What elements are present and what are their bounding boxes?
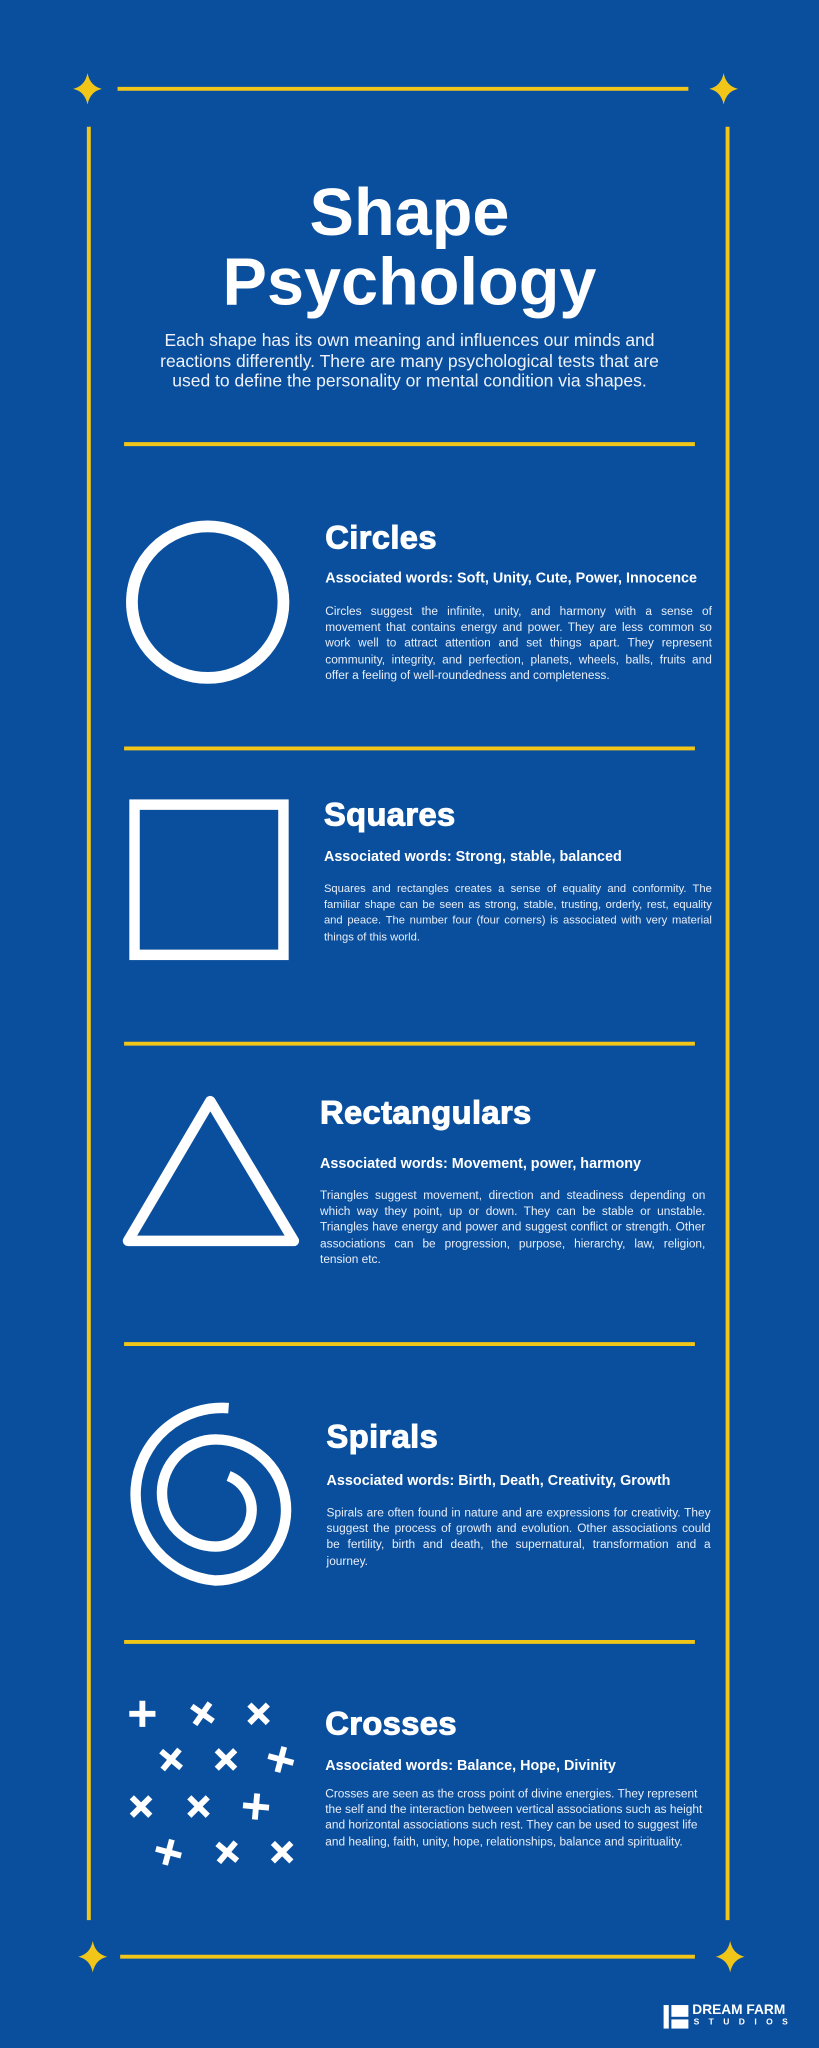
- section: crosses: Crosses: [325, 1706, 457, 1742]
- section: spirals: [326, 1419, 711, 1568]
- section: rectangulars: Associated words: Movement, power, harmony: [320, 1156, 641, 1172]
- section: squares: Associated words: Strong, stable, balanced: [324, 849, 622, 865]
- section: crosses: Crosses are seen as the cross point of divine energies. They represent the self and the interaction between vertical associations such as height and horizontal associations such rest. They can be used to suggest life and healing, faith, unity, hope, relationships, balance and spirituality.: [325, 1787, 702, 1848]
- section: rectangulars: [320, 1095, 706, 1265]
- logo: STUDIOS: [694, 2018, 797, 2027]
- section: rectangulars: Rectangulars: [320, 1095, 532, 1131]
- section: crosses: [325, 1706, 702, 1848]
- section: spirals: Spirals are often found in nature and are expressions for creativity. They suggest the process of growth and evolution. Other associations could be fertility, birth and death, the supernatural, transformation and a journey.: [327, 1506, 711, 1567]
- logo: [664, 2002, 797, 2029]
- logo: DREAM FARM: [692, 2002, 785, 2018]
- title: Psychology: [223, 244, 596, 319]
- icon: spiral: [130, 1402, 292, 1586]
- title: Shape: [310, 175, 509, 249]
- section: circles: [325, 520, 712, 682]
- title: [223, 175, 596, 319]
- icon: crosses: [129, 1700, 294, 1866]
- section: spirals: Associated words: Birth, Death, Creativity, Growth: [327, 1473, 670, 1489]
- icon: square: [129, 799, 289, 960]
- intro text: Each shape has its own meaning and influences our minds and reactions differently. There are many psychological tests that are used to define the personality or mental condition via shapes.: [160, 330, 659, 391]
- section: circles: Associated words: Soft, Unity, Cute, Power, Innocence: [325, 571, 697, 586]
- section: circles: Circles suggest the infinite, unity, and harmony with a sense of movement that contains energy and power. They are less common so work well to attract attention and set things apart. They represent community, integrity, and perfection, planets, wheels, balls, fruits and offer a feeling of well-roundedness and completeness.: [325, 605, 712, 682]
- section: spirals: Spirals: [327, 1419, 438, 1455]
- section: rectangulars: Triangles suggest movement, direction and steadiness depending on which way they point, up or down. They can be stable or unstable. Triangles have energy and power and suggest conflict or strength. Other associations can be progression, purpose, hierarchy, law, religion, tension etc.: [320, 1189, 705, 1265]
- section: squares: [324, 797, 712, 943]
- icon: circle: [126, 520, 290, 684]
- section: circles: Circles: [325, 520, 437, 556]
- icon: triangle: [122, 1096, 300, 1246]
- section: squares: Squares and rectangles creates a sense of equality and conformity. The familiar shape can be seen as strong, stable, trusting, orderly, rest, equality and peace. The number four (four corners) is associated with very material things of this world.: [324, 882, 712, 943]
- section: crosses: Associated words: Balance, Hope, Divinity: [325, 1758, 616, 1774]
- section: squares: Squares: [324, 797, 456, 833]
